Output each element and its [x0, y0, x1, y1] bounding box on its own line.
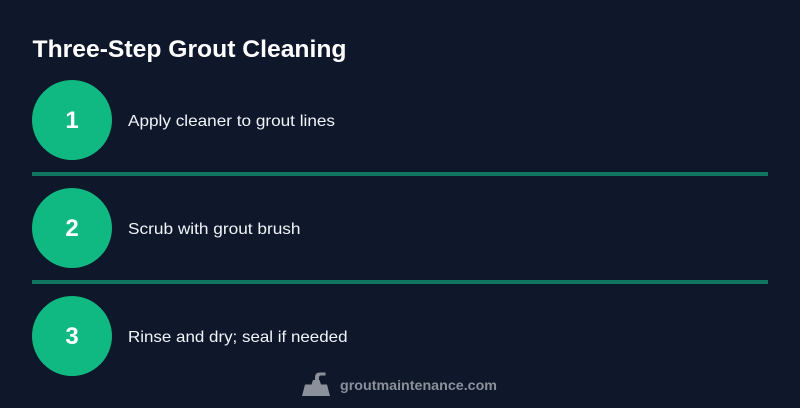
step 3 — [32, 296, 348, 376]
step 2 text: Scrub with grout brush — [128, 221, 300, 238]
step 1 — [32, 80, 335, 160]
step 3 text: Rinse and dry; seal if needed — [128, 329, 348, 346]
step 2 number badge: 2 — [65, 215, 79, 242]
step 2 — [32, 188, 300, 268]
step 1 number badge: 1 — [65, 107, 79, 134]
step 1 text: Apply cleaner to grout lines — [128, 113, 335, 130]
website label: groutmaintenance.com — [340, 377, 497, 393]
step 3 number badge — [32, 296, 112, 376]
step 1 number badge — [32, 80, 112, 160]
footer brand — [302, 372, 497, 396]
step 2 number badge — [32, 188, 112, 268]
step 3 number badge: 3 — [65, 323, 79, 350]
title: Three-Step Grout Cleaning — [32, 36, 346, 63]
icon: grout float — [302, 372, 330, 396]
